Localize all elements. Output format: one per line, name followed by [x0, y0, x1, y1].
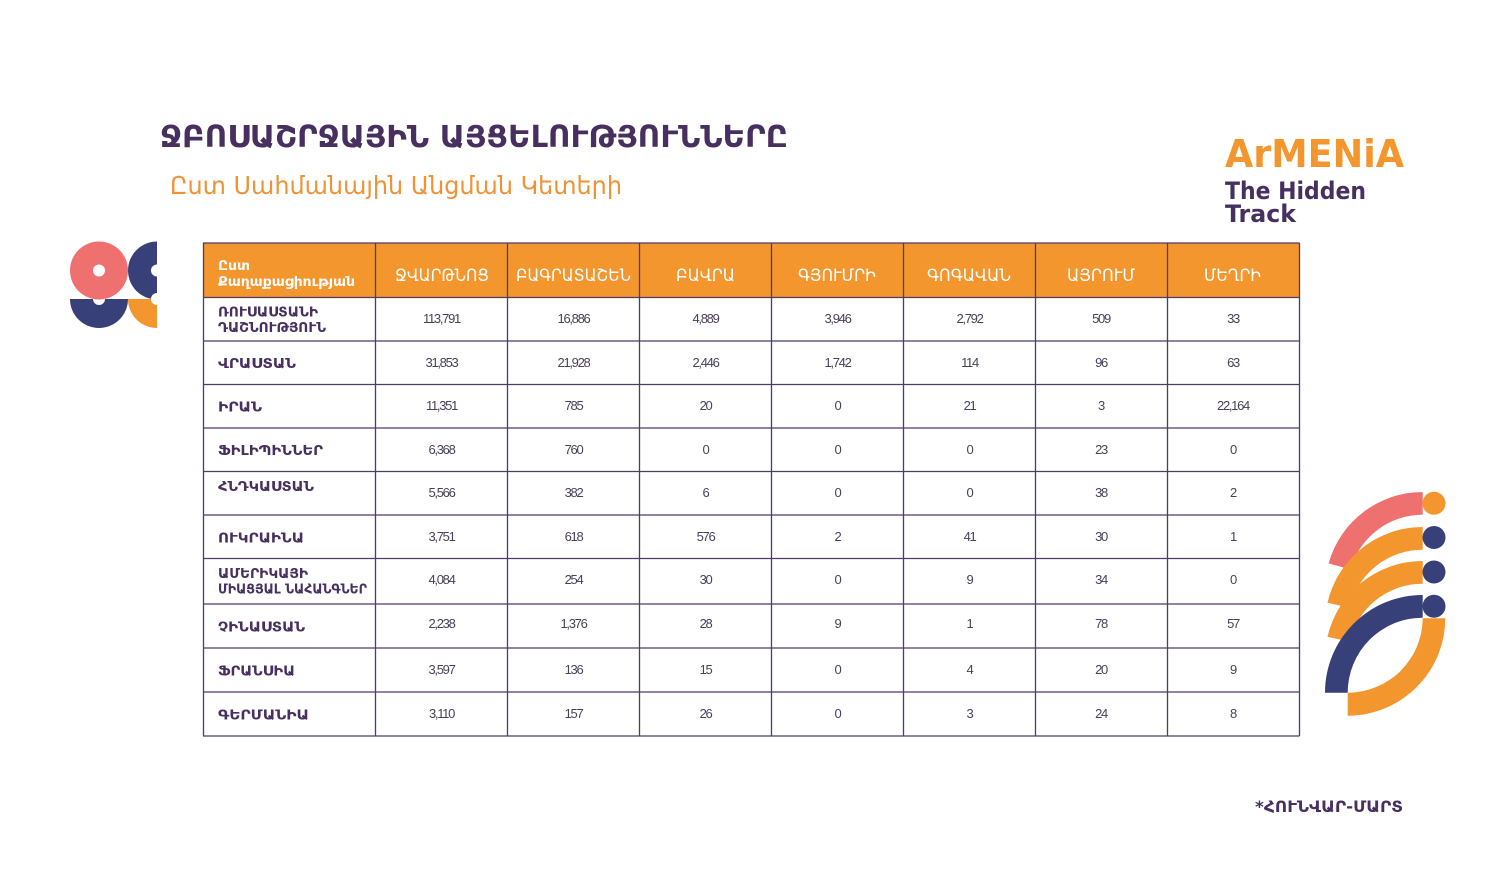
- row: Georgia: 96: [1095, 355, 1108, 370]
- row: India: ՀՆԴԿԱՍՏԱՆ: [218, 479, 314, 495]
- row: United States: 254: [565, 572, 583, 587]
- header row: Քաղաքացիության: [218, 274, 355, 290]
- row: Philippines: ՖԻԼԻՊԻՆՆԵՐ: [218, 443, 323, 459]
- row: France: [218, 662, 1237, 680]
- row: Georgia: 21,928: [558, 355, 591, 370]
- row: United States: 34: [1095, 572, 1108, 587]
- row: Iran: [218, 398, 1250, 416]
- row: Germany: ԳԵՐՄԱՆԻԱ: [218, 708, 309, 724]
- row: Georgia: 1,742: [824, 355, 852, 370]
- row: Iran: 785: [565, 398, 583, 413]
- title: ՋԲՈՍԱՇՐՋԱՅԻՆ ԱՅՑԵԼՈՒԹՅՈՒՆՆԵՐԸ: [160, 120, 788, 155]
- row: United States: 4,084: [428, 572, 456, 587]
- icon: arcs decoration right: [1325, 492, 1446, 716]
- row: Ukraine: 618: [565, 529, 583, 544]
- row: China: ՉԻՆԱՍՏԱՆ: [218, 620, 305, 636]
- row: Philippines: 0: [967, 442, 974, 457]
- row: Philippines: 760: [565, 442, 583, 457]
- row: United States: 9: [967, 572, 974, 587]
- logo: Armenia The Hidden Track: Track: [1225, 200, 1297, 228]
- header row: [218, 258, 1261, 290]
- row: China: 1,376: [560, 616, 588, 631]
- row: Iran: ԻՐԱՆ: [218, 400, 262, 416]
- row: Russia: ՌՈՒՍԱՍՏԱՆԻ: [218, 304, 318, 320]
- row: Russia: 113,791: [423, 311, 461, 326]
- row: India: 0: [835, 485, 842, 500]
- row: Russia: [218, 304, 1240, 336]
- row: China: [218, 616, 1240, 636]
- table: [203, 243, 1300, 736]
- row: China: 1: [967, 616, 974, 631]
- row: Georgia: 2,446: [692, 355, 720, 370]
- row: France: 15: [700, 662, 712, 677]
- row: France: 0: [835, 662, 842, 677]
- row: India: 5,566: [428, 485, 456, 500]
- row: Russia: 33: [1227, 311, 1240, 326]
- row: France: ՖՐԱՆՍԻԱ: [218, 664, 295, 680]
- header row: ԳՅՈՒՄՐԻ: [798, 266, 876, 286]
- row: Philippines: 6,368: [428, 442, 456, 457]
- icon: circles decoration left: [70, 242, 163, 328]
- row: Iran: 22,164: [1217, 398, 1250, 413]
- row: Philippines: 0: [703, 442, 710, 457]
- row: Germany: 3: [967, 706, 974, 721]
- row: France: 3,597: [428, 662, 456, 677]
- row: Iran: 0: [835, 398, 842, 413]
- row: Germany: 8: [1230, 706, 1237, 721]
- header row: ԳՈԳԱՎԱՆ: [927, 266, 1011, 286]
- row: India: [218, 479, 1237, 500]
- logo: Armenia The Hidden Track: [1225, 132, 1405, 228]
- row: Ukraine: 1: [1230, 529, 1237, 544]
- row: Germany: 26: [700, 706, 712, 721]
- row: France: 136: [565, 662, 583, 677]
- row: Iran: 20: [700, 398, 712, 413]
- row: Georgia: [218, 355, 1240, 372]
- row: China: 2,238: [428, 616, 456, 631]
- row: India: 2: [1230, 485, 1237, 500]
- header row: Ըստ: [218, 258, 250, 274]
- row: Ukraine: 30: [1095, 529, 1108, 544]
- header row: ՋՎԱՐԹՆՈՑ: [395, 266, 489, 286]
- subtitle: Ըստ Սահմանային Անցման Կետերի: [170, 171, 622, 200]
- row: Iran: 3: [1098, 398, 1105, 413]
- row: Russia: ԴԱՇՆՈՒԹՅՈՒՆ: [218, 320, 326, 336]
- row: India: 6: [703, 485, 710, 500]
- row: Germany: 157: [565, 706, 583, 721]
- logo: Armenia The Hidden Track: The Hidden: [1225, 177, 1366, 205]
- row: Ukraine: 41: [964, 529, 976, 544]
- row: Iran: 11,351: [426, 398, 458, 413]
- row: United States: ՄԻԱՑՅԱԼ ՆԱՀԱՆԳՆԵՐ: [218, 582, 367, 598]
- row: China: 57: [1227, 616, 1240, 631]
- row: Philippines: 23: [1095, 442, 1108, 457]
- row: China: 78: [1095, 616, 1108, 631]
- header row: ԱՅՐՈՒՄ: [1067, 266, 1136, 286]
- row: United States: 0: [1230, 572, 1237, 587]
- row: India: 382: [565, 485, 583, 500]
- header row: ՄԵՂՐԻ: [1204, 266, 1261, 286]
- row: China: 28: [700, 616, 712, 631]
- row: United States: 0: [835, 572, 842, 587]
- row: Ukraine: ՈՒԿՐԱԻՆԱ: [218, 530, 304, 546]
- row: Georgia: 31,853: [426, 355, 459, 370]
- row: Ukraine: 576: [697, 529, 715, 544]
- row: Germany: [218, 706, 1237, 724]
- row: France: 9: [1230, 662, 1237, 677]
- row: Russia: 3,946: [824, 311, 852, 326]
- row: India: 38: [1095, 485, 1108, 500]
- row: Philippines: [218, 442, 1237, 459]
- row: Georgia: 63: [1227, 355, 1240, 370]
- row: United States: 30: [700, 572, 712, 587]
- row: Philippines: 0: [1230, 442, 1237, 457]
- row: Iran: 21: [964, 398, 976, 413]
- footnote: *ՀՈՒՆՎԱՐ-ՄԱՐՏ: [1255, 797, 1403, 816]
- row: Georgia: ՎՐԱՍՏԱՆ: [218, 356, 296, 372]
- row: France: 20: [1095, 662, 1108, 677]
- row: Germany: 0: [835, 706, 842, 721]
- table grid: [203, 243, 1300, 736]
- row: Ukraine: [218, 529, 1237, 546]
- row: Russia: 2,792: [956, 311, 984, 326]
- row: Philippines: 0: [835, 442, 842, 457]
- row: United States: ԱՄԵՐԻԿԱՅԻ: [218, 566, 308, 582]
- row: Russia: 509: [1092, 311, 1111, 326]
- row: Ukraine: 2: [835, 529, 842, 544]
- table header background: [203, 243, 1299, 298]
- header row: ԲԱՎՐԱ: [676, 266, 735, 286]
- row: India: 0: [967, 485, 974, 500]
- row: Georgia: 114: [961, 355, 979, 370]
- row: Russia: 16,886: [558, 311, 591, 326]
- row: United States: [218, 566, 1237, 598]
- row: Germany: 3,110: [429, 706, 455, 721]
- logo: Armenia The Hidden Track: ArMENiA: [1225, 132, 1405, 176]
- row: Germany: 24: [1095, 706, 1108, 721]
- header row: ԲԱԳՐԱՏԱՇԵՆ: [516, 266, 631, 286]
- row: Ukraine: 3,751: [428, 529, 456, 544]
- row: France: 4: [967, 662, 974, 677]
- row: Russia: 4,889: [692, 311, 720, 326]
- row: China: 9: [835, 616, 842, 631]
